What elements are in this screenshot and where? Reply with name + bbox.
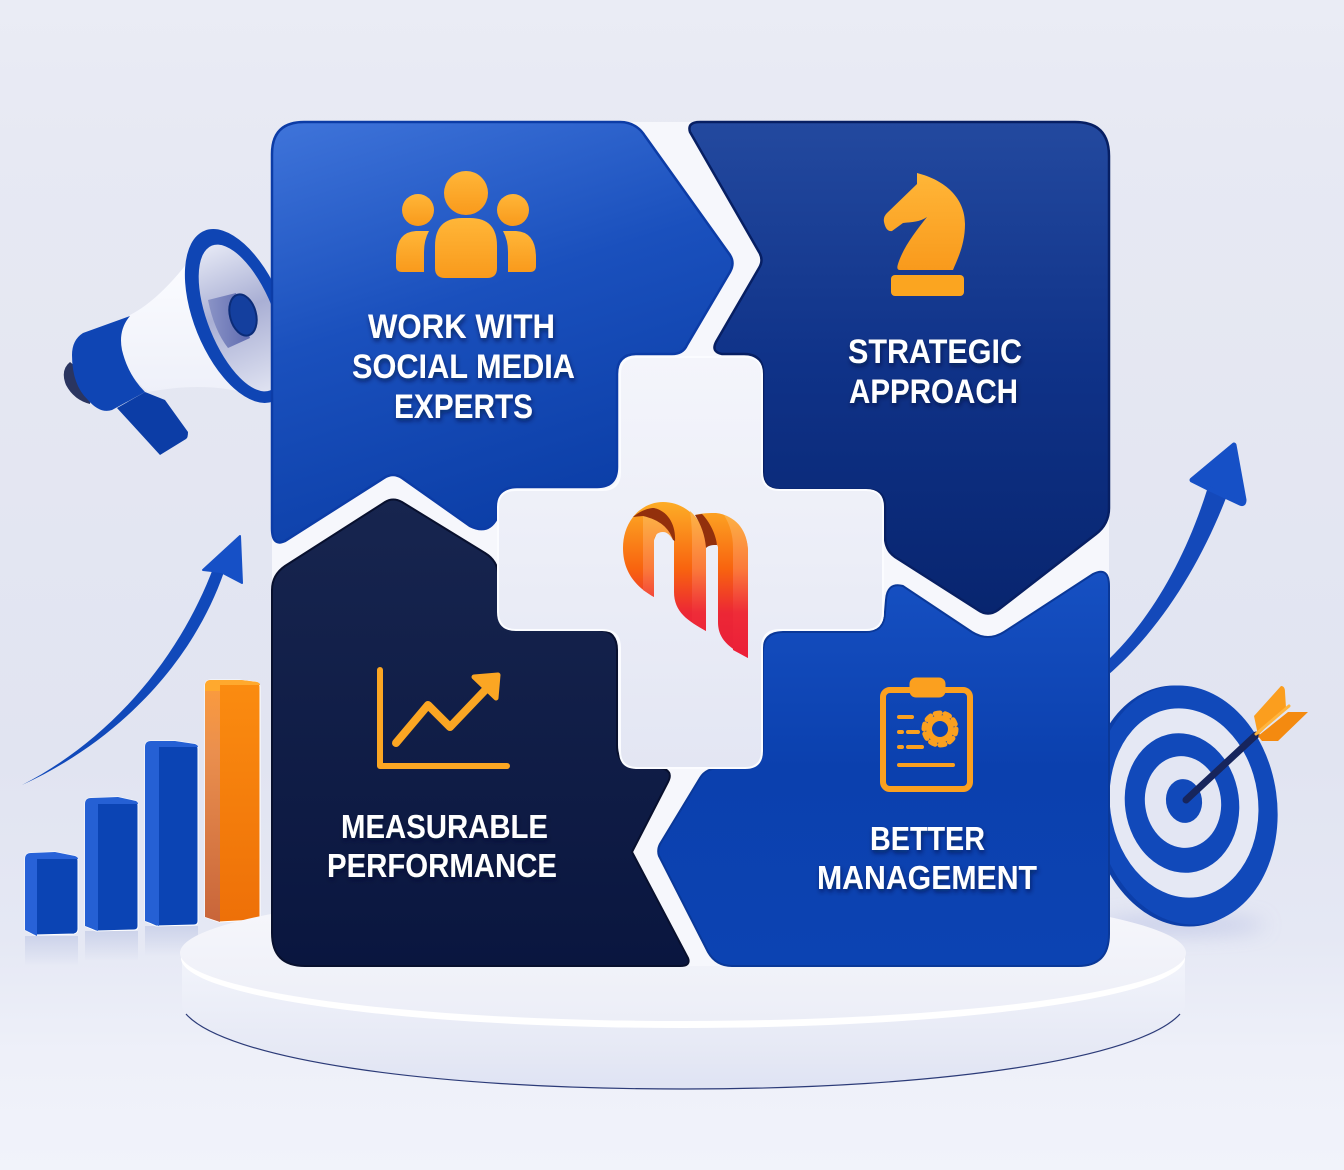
right rising arrow [1108, 445, 1244, 675]
label: better management [817, 820, 1037, 896]
label: strategic approach [848, 333, 1022, 411]
icon: growth chart [380, 670, 507, 766]
panel: better management [658, 572, 1109, 966]
label: better management: MANAGEMENT [817, 859, 1037, 896]
target with dart [1074, 673, 1308, 939]
label: better management: BETTER [870, 820, 985, 857]
panel: work with social media experts [272, 122, 732, 542]
panel: strategic approach [689, 122, 1109, 614]
white base behind puzzle [272, 122, 1109, 966]
label: work with social media experts [352, 308, 575, 426]
bar chart decoration [25, 680, 260, 966]
label: work with social media experts: WORK WITH [368, 308, 555, 346]
icon: chess knight [884, 173, 965, 296]
megaphone [64, 214, 315, 455]
label: work with social media experts: SOCIAL MEDIA [352, 348, 575, 386]
label: measurable performance [327, 808, 557, 884]
label: measurable performance: MEASURABLE [341, 808, 548, 845]
left rising arrow [22, 536, 242, 785]
icon: people group [396, 171, 536, 278]
center white cross [498, 357, 883, 768]
label: measurable performance: PERFORMANCE [327, 847, 557, 884]
label: strategic approach: APPROACH [849, 373, 1018, 411]
panel: measurable performance [272, 500, 689, 966]
label: strategic approach: STRATEGIC [848, 333, 1022, 371]
icon: clipboard with gear [883, 679, 970, 789]
center logo [623, 502, 748, 658]
white podium [180, 885, 1186, 1089]
label: work with social media experts: EXPERTS [394, 388, 533, 426]
